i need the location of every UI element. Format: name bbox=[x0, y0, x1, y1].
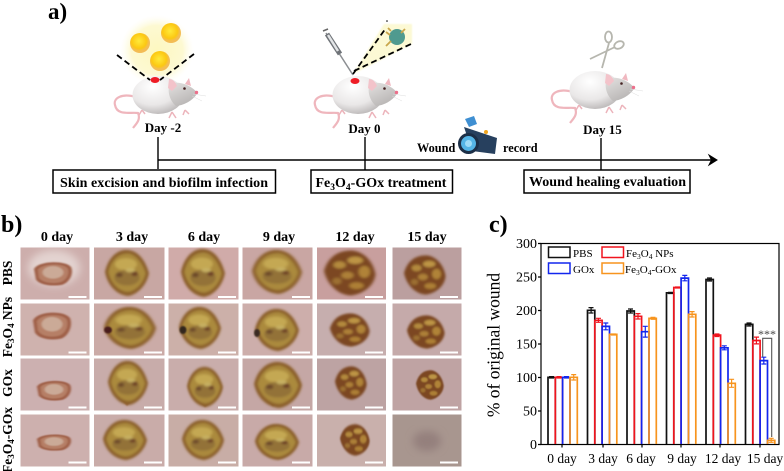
label: day 15: Day 15 bbox=[583, 122, 622, 137]
icon: camera bbox=[458, 116, 497, 154]
legend: Fe bbox=[625, 264, 636, 276]
photo row: Fe3O4-GOx bbox=[20, 414, 462, 466]
y tick labels bbox=[516, 237, 537, 453]
legend: 4 bbox=[648, 268, 652, 277]
photo row: GOx bbox=[20, 358, 462, 410]
bars: Fe3O4 NPs bbox=[555, 287, 760, 444]
box: wound healing evaluation bbox=[524, 170, 690, 193]
box: Fe3O4-GOx treatment: Fe bbox=[316, 176, 330, 191]
column headings: 15 day bbox=[407, 230, 447, 245]
row headings: -GOx bbox=[0, 407, 15, 439]
panel label b: b) bbox=[1, 212, 22, 238]
column headings: 0 day bbox=[41, 230, 73, 245]
column headings: 3 day bbox=[116, 230, 148, 245]
plot frame and ticks bbox=[538, 244, 779, 448]
icon: pipette bbox=[323, 29, 353, 75]
mouse: day 15 bbox=[552, 71, 643, 123]
row headings: 4 bbox=[6, 439, 16, 444]
significance bracket: *** bbox=[758, 327, 776, 341]
bars: Fe3O4-GOx bbox=[570, 312, 775, 444]
y tick labels: 300 bbox=[516, 237, 537, 252]
column headings bbox=[41, 230, 447, 245]
row headings: NPs bbox=[0, 297, 15, 323]
icon: scissors bbox=[590, 32, 625, 68]
y tick labels: 200 bbox=[516, 304, 537, 319]
legend: PBS bbox=[573, 248, 593, 260]
y tick labels: 150 bbox=[516, 338, 537, 352]
row headings: Fe bbox=[0, 343, 15, 357]
icon: Fe3O4-GOx nanoparticle magnified bbox=[353, 20, 412, 74]
y tick labels: 0 bbox=[530, 438, 537, 453]
mouse: day -2 bbox=[115, 76, 206, 128]
box: wound healing evaluation: Wound healing evaluation bbox=[529, 175, 686, 190]
zoom lines and wound: day -2 bbox=[117, 54, 194, 83]
panel b: wound photo grid bbox=[0, 230, 462, 471]
column headings: 9 day bbox=[263, 230, 295, 245]
column headings: 6 day bbox=[188, 230, 220, 245]
legend: Fe bbox=[626, 248, 637, 260]
box: Fe3O4-GOx treatment: 3 bbox=[330, 183, 335, 193]
scale bars bbox=[68, 296, 458, 464]
legend: -GOx bbox=[651, 264, 677, 276]
panel a: experimental timeline bbox=[53, 15, 717, 193]
y tick labels: 50 bbox=[523, 404, 537, 420]
legend: 3 bbox=[637, 252, 641, 261]
legend: O bbox=[640, 264, 648, 276]
row headings: GOx bbox=[0, 369, 15, 397]
box: Fe3O4-GOx treatment bbox=[311, 170, 452, 193]
label: wound record: Wound bbox=[417, 141, 455, 155]
label: day -2: Day -2 bbox=[145, 120, 181, 135]
row headings bbox=[0, 261, 16, 471]
legend bbox=[548, 247, 677, 277]
box: Fe3O4-GOx treatment: O bbox=[335, 176, 346, 191]
photo row: Fe3O4 NPs bbox=[20, 304, 462, 356]
y axis title: % of original wound bbox=[484, 273, 504, 417]
timeline arrow bbox=[158, 137, 717, 170]
label: day 0: Day 0 bbox=[348, 121, 381, 136]
y tick labels: 100 bbox=[516, 371, 537, 386]
x tick labels: 9 day bbox=[667, 451, 697, 466]
icon: bacterial biofilm magnified bbox=[120, 15, 194, 85]
panel c: bar chart bbox=[484, 237, 783, 466]
legend: O bbox=[641, 248, 649, 260]
legend: 3 bbox=[636, 268, 640, 277]
row headings: O bbox=[0, 444, 15, 454]
x tick labels: 6 day bbox=[626, 451, 656, 466]
row headings: 3 bbox=[6, 454, 16, 459]
x tick labels: 12 day bbox=[705, 451, 741, 466]
x tick labels: 15 day bbox=[747, 451, 783, 466]
legend: NPs bbox=[652, 248, 674, 260]
row headings: 4 bbox=[6, 323, 16, 328]
y tick labels: 250 bbox=[516, 270, 537, 286]
row headings: 3 bbox=[6, 338, 16, 343]
box: skin excision and biofilm infection: Skin excision and biofilm infection bbox=[60, 176, 268, 191]
panel label c: c) bbox=[489, 212, 508, 238]
x tick labels: 0 day bbox=[547, 451, 577, 466]
box: skin excision and biofilm infection bbox=[53, 170, 276, 193]
mouse: day 0 bbox=[315, 76, 406, 128]
row headings: O bbox=[0, 328, 15, 338]
legend: GOx bbox=[573, 264, 595, 276]
row headings: PBS bbox=[0, 261, 15, 285]
legend: 4 bbox=[649, 252, 653, 261]
x tick labels bbox=[547, 451, 783, 466]
bars: PBS bbox=[548, 278, 753, 444]
zoom lines and wound: day 0 bbox=[350, 28, 411, 84]
box: Fe3O4-GOx treatment: 4 bbox=[346, 183, 351, 193]
column headings: 12 day bbox=[335, 230, 375, 245]
box: Fe3O4-GOx treatment: -GOx treatment bbox=[351, 176, 447, 191]
significance bracket bbox=[758, 327, 776, 437]
label: wound record: record bbox=[503, 141, 538, 155]
label: wound record bbox=[417, 141, 538, 155]
x tick labels: 3 day bbox=[588, 451, 618, 466]
photo row: PBS bbox=[20, 248, 462, 300]
bars: GOx bbox=[563, 275, 768, 444]
